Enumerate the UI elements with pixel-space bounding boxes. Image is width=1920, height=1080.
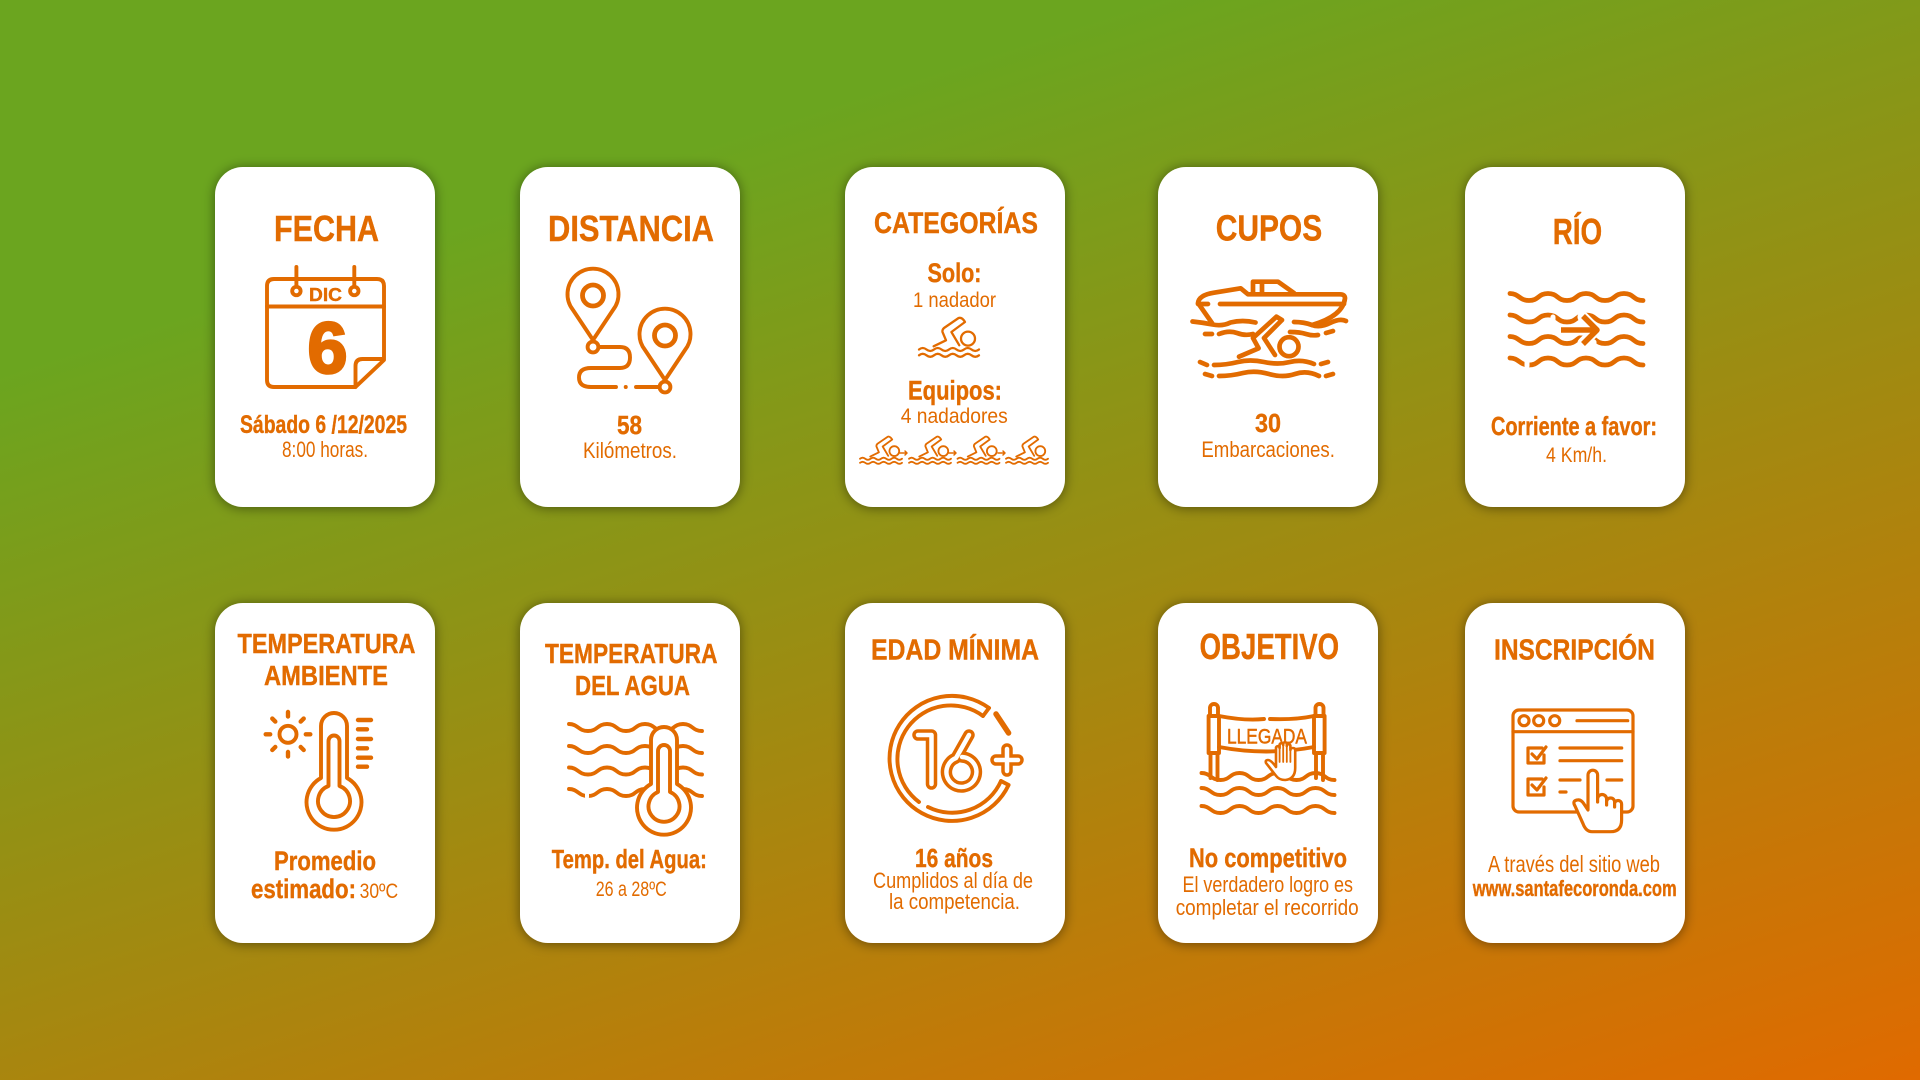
- water label: Temp. del Agua:: [552, 844, 707, 874]
- summary: Promedio: [274, 846, 376, 876]
- age condition: la competencia.: [889, 889, 1020, 914]
- icon: finish banner: [1202, 704, 1334, 813]
- card background: [1465, 167, 1685, 507]
- value: 30: [1255, 408, 1281, 438]
- icon: web form with pointer: [1513, 710, 1633, 832]
- equipos detail: 4 nadadores: [901, 405, 1008, 428]
- icon: 16 plus badge: [890, 696, 1018, 821]
- card background: [520, 167, 740, 507]
- water temperature value: 26 a 28ºC: [596, 878, 667, 901]
- panel: distancia: [520, 167, 740, 507]
- date: Sábado 6 /12/2025: [240, 411, 407, 439]
- current speed: 4 Km/h.: [1546, 444, 1607, 467]
- heading: edad mínima: EDAD MÍNIMA: [871, 632, 1039, 666]
- icon: relay of four swimmers: [860, 437, 1048, 464]
- goal detail: completar el recorrido: [1176, 895, 1359, 920]
- equipos label: Equipos:: [908, 376, 1002, 406]
- solo label: Solo:: [928, 258, 982, 288]
- value: 58: [617, 410, 642, 440]
- heading: temperatura del agua: [545, 638, 718, 701]
- heading: objetivo: OBJETIVO: [1200, 626, 1339, 667]
- heading: temperatura ambiente: [238, 628, 416, 691]
- card background: [1158, 167, 1378, 507]
- solo detail: 1 nadador: [913, 289, 996, 312]
- icon: calendar: [267, 267, 384, 389]
- website: www.santafecoronda.com: [1472, 876, 1677, 901]
- panel: inscripción: [1465, 603, 1685, 943]
- panel: temperatura del agua: [520, 603, 740, 943]
- card background: [1465, 603, 1685, 943]
- heading: fecha: FECHA: [274, 208, 379, 249]
- card background: [845, 167, 1065, 507]
- current label: Corriente a favor:: [1491, 411, 1657, 441]
- heading: temperatura del agua: DEL AGUA: [575, 670, 690, 701]
- panel: río: [1465, 167, 1685, 507]
- card background: [845, 603, 1065, 943]
- panel: fecha: [215, 167, 435, 507]
- time: 8:00 horas.: [282, 437, 368, 462]
- icon: river current: [1510, 294, 1643, 366]
- unit: Kilómetros.: [583, 438, 677, 463]
- panel: objetivo: [1158, 603, 1378, 943]
- icon: sun and thermometer: [266, 712, 371, 830]
- card background: [215, 603, 435, 943]
- heading: cupos: CUPOS: [1216, 208, 1322, 248]
- icon: water thermometer: [569, 724, 702, 835]
- ambient temperature value: 30ºC: [360, 880, 398, 903]
- heading: río: RÍO: [1553, 211, 1602, 252]
- icon: finish banner: LLEGADA: [1227, 726, 1307, 748]
- panel: temperatura ambiente: [215, 603, 435, 943]
- estimated label: estimado:: [251, 874, 356, 904]
- goal label: No competitivo: [1189, 843, 1347, 873]
- age condition: [873, 868, 1033, 914]
- icon: boat and swimmer: [1192, 282, 1346, 376]
- heading: temperatura del agua: TEMPERATURA: [545, 638, 718, 669]
- icon: swimmer: [919, 318, 979, 357]
- icon: calendar: 6: [308, 309, 348, 389]
- age condition: Cumplidos al día de: [873, 868, 1033, 893]
- unit: Embarcaciones.: [1201, 437, 1335, 462]
- heading: inscripción: INSCRIPCIÓN: [1494, 632, 1655, 666]
- icon: route pins: [568, 269, 691, 392]
- panel: cupos: [1158, 167, 1378, 507]
- heading: categorías: CATEGORÍAS: [874, 206, 1038, 240]
- heading: temperatura ambiente: TEMPERATURA: [238, 628, 416, 659]
- icon: calendar: DIC: [309, 284, 342, 305]
- age value: 16 años: [915, 843, 993, 873]
- goal detail: [1176, 872, 1359, 920]
- card background: [520, 603, 740, 943]
- panel: categorías: [845, 167, 1065, 507]
- heading: temperatura ambiente: AMBIENTE: [264, 660, 388, 691]
- goal detail: El verdadero logro es: [1182, 872, 1353, 897]
- heading: distancia: DISTANCIA: [548, 208, 714, 249]
- registration text: A través del sitio web: [1488, 851, 1660, 877]
- card background: [215, 167, 435, 507]
- panel: edad mínima: [845, 603, 1065, 943]
- card background: [1158, 603, 1378, 943]
